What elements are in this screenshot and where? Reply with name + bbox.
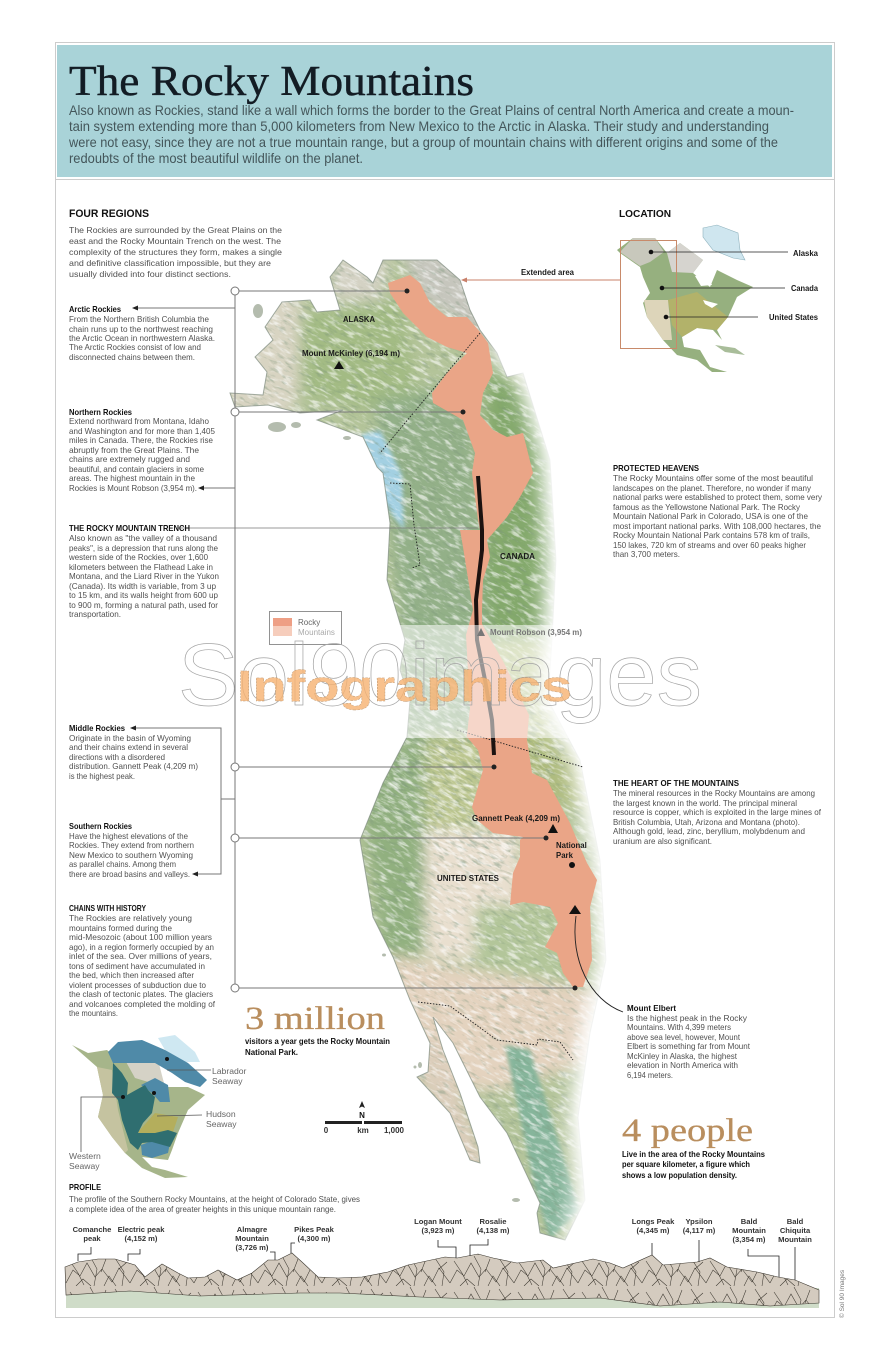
chains with history text: the bed, which then increased after <box>69 970 194 980</box>
peak labels: (4,117 m) <box>683 1226 716 1235</box>
heart of the mountains text: THE HEART OF THE MOUNTAINS <box>613 778 739 788</box>
peak labels: Rosalie <box>479 1217 507 1226</box>
northern rockies text: Northern Rockies <box>69 407 132 417</box>
seaway inset map: Hudson <box>206 1109 236 1119</box>
small islands <box>253 304 520 1202</box>
heart of the mountains text <box>613 778 822 846</box>
main relief map <box>229 260 606 1240</box>
intro text: redoubts of the most beautiful wildlife on the planet. <box>69 151 363 166</box>
arctic rockies text: disconnected chains between them. <box>69 352 195 362</box>
mount elbert text: 6,194 meters. <box>627 1070 673 1080</box>
stat: 3 million: National Park. <box>245 1048 298 1057</box>
peak labels: (4,345 m) <box>637 1226 670 1235</box>
legend: Mountains <box>298 628 335 637</box>
location inset map: United States <box>769 313 819 322</box>
heart of the mountains text: uranium are also significant. <box>613 836 712 846</box>
peak labels: Pikes Peak <box>294 1225 335 1234</box>
rocky mountains region <box>388 275 597 987</box>
legend <box>270 612 342 644</box>
map labels: ALASKA <box>343 315 375 324</box>
scale bar <box>324 1101 405 1135</box>
northern rockies text: miles in Canada. There, the Rockies rise <box>69 435 213 445</box>
protected heavens text: national parks were established to protect them, some very <box>613 492 823 502</box>
peak labels: Longs Peak <box>632 1217 675 1226</box>
chains with history text: mid-Mesozoic (about 100 million years <box>69 932 212 942</box>
chains with history text: CHAINS WITH HISTORY <box>69 903 146 913</box>
land colour and relief <box>230 260 606 1240</box>
seaway inset map <box>69 1035 247 1178</box>
peak labels: (4,152 m) <box>125 1234 158 1243</box>
northern rockies text: chains are extremely rugged and <box>69 454 190 464</box>
peak labels: Ypsilon <box>685 1217 713 1226</box>
southern rockies text: Southern Rockies <box>69 821 132 831</box>
protected heavens text: 150 lakes, 720 km of streams and over 60 peaks higher <box>613 540 806 550</box>
middle rockies text: and their chains extend in several <box>69 742 188 752</box>
mount elbert text <box>627 1003 751 1080</box>
hudson seaway and gulf <box>141 1078 170 1102</box>
four regions intro: complexity of the structures they form, makes a single <box>69 247 282 257</box>
peak labels: Almagre <box>237 1225 267 1234</box>
legend: Rocky <box>298 618 320 627</box>
four regions intro: east and the Rocky Mountain Trench on the west. The <box>69 236 281 246</box>
map labels: National <box>556 841 587 850</box>
mount elbert text: Mountains. With 4,399 meters <box>627 1022 731 1032</box>
peak labels: Bald <box>741 1217 758 1226</box>
extended area arrow: Extended area <box>521 268 575 277</box>
southern rockies text: New Mexico to southern Wyoming <box>69 850 193 860</box>
watermark: Sol90images <box>178 625 702 724</box>
map labels: Mount Robson (3,954 m) <box>490 628 582 637</box>
location leaders <box>649 250 788 319</box>
scale bar: N <box>359 1111 365 1120</box>
extended area arrow <box>461 268 620 282</box>
region leader lines <box>130 287 578 992</box>
copyright: © Sol 90 Images <box>838 1269 846 1318</box>
heart of the mountains text: The mineral resources in the Rocky Mountains are among <box>613 788 815 798</box>
heart of the mountains text: the largest known in the world. The principal mineral <box>613 798 797 808</box>
peak labels: Comanche <box>73 1225 111 1234</box>
peak labels <box>73 1217 812 1252</box>
land <box>72 1045 205 1178</box>
four regions intro <box>69 208 282 279</box>
peak labels: Mountain <box>778 1235 812 1244</box>
chains with history text: mountains formed during the <box>69 923 172 933</box>
arctic rockies text <box>69 304 215 362</box>
peak labels: Electric peak <box>118 1225 165 1234</box>
protected heavens text: Rocky Mountain National Park contains 578 km of trails, <box>613 530 810 540</box>
stat: 4 people: Live in the area of the Rocky Mountains <box>622 1150 766 1159</box>
mount elbert text: above sea level, however, Mount <box>627 1032 741 1042</box>
greenland <box>158 1035 200 1062</box>
protected heavens text: than 3,700 meters. <box>613 549 680 559</box>
location inset map: Canada <box>791 284 819 293</box>
watermark: Infographics <box>237 662 572 711</box>
northern rockies text: abruptly from the Great Plains. The <box>69 445 199 455</box>
peak labels: Mountain <box>732 1226 766 1235</box>
stat: 4 people: per square kilometer, a figure which <box>622 1160 750 1169</box>
peak labels: (3,354 m) <box>733 1235 766 1244</box>
four regions intro: FOUR REGIONS <box>69 208 149 220</box>
middle rockies text: directions with a disordered <box>69 752 165 762</box>
chains with history text: violent processes of subduction due to <box>69 980 206 990</box>
trench text: kilometers between the Flathead Lake in <box>69 562 213 572</box>
seaway inset map: Western <box>69 1151 101 1161</box>
header panel <box>57 45 832 177</box>
northern rockies text: areas. The highest mountain in the <box>69 473 195 483</box>
trench text: to 900 m, forming a natural path, used for <box>69 600 218 610</box>
southern rockies text: there are broad basins and valleys. <box>69 869 190 879</box>
coast outline <box>230 260 606 1240</box>
trench text: Also known as "the valley of a thousand <box>69 533 217 543</box>
map labels: Park <box>556 851 574 860</box>
seaway inset map: Seaway <box>212 1076 243 1086</box>
chains with history text: inlet of the sea. Over millions of years, <box>69 951 212 961</box>
chains with history text: The Rockies are relatively young <box>69 913 192 923</box>
seaway leaders <box>81 1070 211 1152</box>
northern rockies text: beautiful, and contain glaciers in some <box>69 464 204 474</box>
western seaway <box>112 1063 177 1150</box>
stat: 4 people: 4 people <box>622 1113 753 1149</box>
trench text: (Canada). Its width is variable, from 3 up <box>69 581 216 591</box>
four regions intro: usually divided into four distinct sections. <box>69 269 231 279</box>
four regions intro: The Rockies are surrounded by the Great Plains on the <box>69 225 282 235</box>
protected heavens text <box>613 463 823 559</box>
trench text: western side of the Rockies, over 1,600 <box>68 552 208 562</box>
mount elbert text: Mount Elbert <box>627 1003 676 1013</box>
trench text: to 15 km, and its walls height from 600 up <box>69 590 218 600</box>
protected heavens text: The Rocky Mountains offer some of the most beautiful <box>613 473 813 483</box>
northern rockies text: and Washington and for more than 1,405 <box>69 426 215 436</box>
mount elbert text: Elbert is something far from Mount <box>627 1041 751 1051</box>
intro text <box>68 103 794 166</box>
watermark lightening band <box>235 625 702 738</box>
map labels: Gannett Peak (4,209 m) <box>472 814 560 823</box>
four regions intro: and definitive classification impossible, but they are <box>69 258 271 268</box>
seaway inset map: Labrador <box>212 1066 247 1076</box>
arctic rockies text: The Arctic Rockies consist of low and <box>69 342 201 352</box>
middle rockies text: Middle Rockies <box>69 723 125 733</box>
middle rockies text: is the highest peak. <box>69 771 135 781</box>
mount elbert text: elevation in North America with <box>627 1060 738 1070</box>
mount elbert text: Is the highest peak in the Rocky <box>627 1013 748 1023</box>
peak labels: peak <box>83 1234 101 1243</box>
chains with history text <box>69 903 216 1018</box>
trench text: Montana, and the Liard River in the Yukon <box>69 571 219 581</box>
trench text: peaks", is a depression that runs along the <box>69 543 218 553</box>
stat: 3 million: 3 million <box>245 1001 385 1037</box>
intro text: were not easy, since they are not a true mountain range, but a group of mountain chains with different origins and some of the <box>68 135 778 150</box>
arctic rockies text: chain runs up to the northwest reaching <box>69 324 213 334</box>
scale bar: 1,000 <box>384 1126 405 1135</box>
northern rockies text: Rockies is Mount Robson (3,954 m). <box>69 483 197 493</box>
protected heavens text: famous as the Yellowstone National Park. The Rocky <box>613 502 801 512</box>
mountain profile <box>65 1217 819 1308</box>
arctic rockies text: Arctic Rockies <box>69 304 121 314</box>
dotted borders <box>380 333 583 1060</box>
title: The Rocky Mountains <box>69 59 474 105</box>
arctic rockies text: the Arctic Ocean in northwestern Alaska. <box>69 333 215 343</box>
location inset map: Alaska <box>793 249 819 258</box>
mount elbert text: McKinley in Alaska, the highest <box>627 1051 738 1061</box>
labrador seaway <box>108 1040 207 1087</box>
trench text: THE ROCKY MOUNTAIN TRENCH <box>69 523 190 533</box>
profile text <box>69 1182 360 1214</box>
peak labels: (4,138 m) <box>477 1226 510 1235</box>
peak labels: Chiquita <box>780 1226 811 1235</box>
location inset map: LOCATION <box>619 208 671 220</box>
southern rockies text: as parallel chains. Among them <box>69 859 176 869</box>
southern rockies text: Rockies. They extend from northern <box>69 840 194 850</box>
peak labels: (3,923 m) <box>422 1226 455 1235</box>
arctic rockies text: From the Northern British Columbia the <box>69 314 209 324</box>
middle rockies text <box>69 723 198 781</box>
map labels: Mount McKinley (6,194 m) <box>302 349 400 358</box>
chains with history text: ago), in a region formerly occupied by an <box>69 942 214 952</box>
peak labels: (3,726 m) <box>236 1243 269 1252</box>
scale bar: 0 <box>324 1126 329 1135</box>
protected heavens text: landscapes on the planet. Therefore, no wonder if many <box>613 483 812 493</box>
map labels <box>302 315 623 1012</box>
middle rockies text: Originate in the basin of Wyoming <box>69 733 191 743</box>
protected heavens text: PROTECTED HEAVENS <box>613 463 699 473</box>
trench text: transportation. <box>69 609 121 619</box>
rocky mountain trench <box>476 476 494 755</box>
map labels: UNITED STATES <box>437 874 499 883</box>
stat: 4 people <box>622 1113 766 1180</box>
peak labels: Mountain <box>235 1234 269 1243</box>
peak labels: Bald <box>787 1217 804 1226</box>
seaway inset map: Seaway <box>69 1161 100 1171</box>
profile text: The profile of the Southern Rocky Mountains, at the height of Colorado State, gives <box>69 1194 360 1204</box>
extent box <box>620 240 676 348</box>
chains with history text: tons of sediment have accumulated in <box>69 961 205 971</box>
north america land <box>617 238 753 372</box>
chains with history text: the mountains. <box>69 1008 118 1018</box>
scale bar: km <box>357 1126 369 1135</box>
eastern edge fade <box>492 340 700 1262</box>
stat: 4 people: shows a low population density. <box>622 1171 737 1180</box>
chains with history text: the clash of tectonic plates. The glaciers <box>69 989 213 999</box>
profile text: a complete idea of the area of greater heights in this unique mountain range. <box>69 1204 336 1214</box>
heart of the mountains text: resource is copper, which is exploited in the large mines of <box>613 807 822 817</box>
intro text: Also known as Rockies, stand like a wall which forms the border to the Great Plains of central North America and create a moun- <box>69 103 794 118</box>
peak leaders <box>78 1239 795 1280</box>
heart of the mountains text: British Columbia, Utah, Arizona and Montana (photo). <box>613 817 800 827</box>
profile text: PROFILE <box>69 1182 101 1192</box>
caribbean islands <box>715 345 745 355</box>
northern rockies text <box>69 407 215 493</box>
protected heavens text: most important national parks. With 108,000 hectares, the <box>613 521 821 531</box>
middle rockies text: distribution. Gannett Peak (4,209 m) <box>69 761 198 771</box>
intro text: tain system extending more than 5,000 kilometers from New Mexico to the Arctic in Alaska. Their study and understanding <box>69 119 769 134</box>
protected heavens text: Mountain National Park in Colorado, USA is one of the <box>613 511 808 521</box>
northern rockies text: Extend northward from Montana, Idaho <box>69 416 209 426</box>
heart of the mountains text: Although gold, lead, zinc, beryllium, molybdenum and <box>613 826 805 836</box>
chains with history text: and volcanoes completed the molding of <box>69 999 216 1009</box>
southern rockies text <box>69 821 194 879</box>
map labels: CANADA <box>500 552 535 561</box>
trench text <box>68 523 219 619</box>
peak labels: Logan Mount <box>414 1217 462 1226</box>
stat: 3 million <box>245 1001 390 1057</box>
stat: 3 million: visitors a year gets the Rocky Mountain <box>245 1037 390 1046</box>
southern rockies text: Have the highest elevations of the <box>69 831 188 841</box>
icon: greenland <box>703 225 745 260</box>
peak labels: (4,300 m) <box>298 1234 331 1243</box>
location inset map <box>617 208 819 372</box>
seaway inset map: Seaway <box>206 1119 237 1129</box>
